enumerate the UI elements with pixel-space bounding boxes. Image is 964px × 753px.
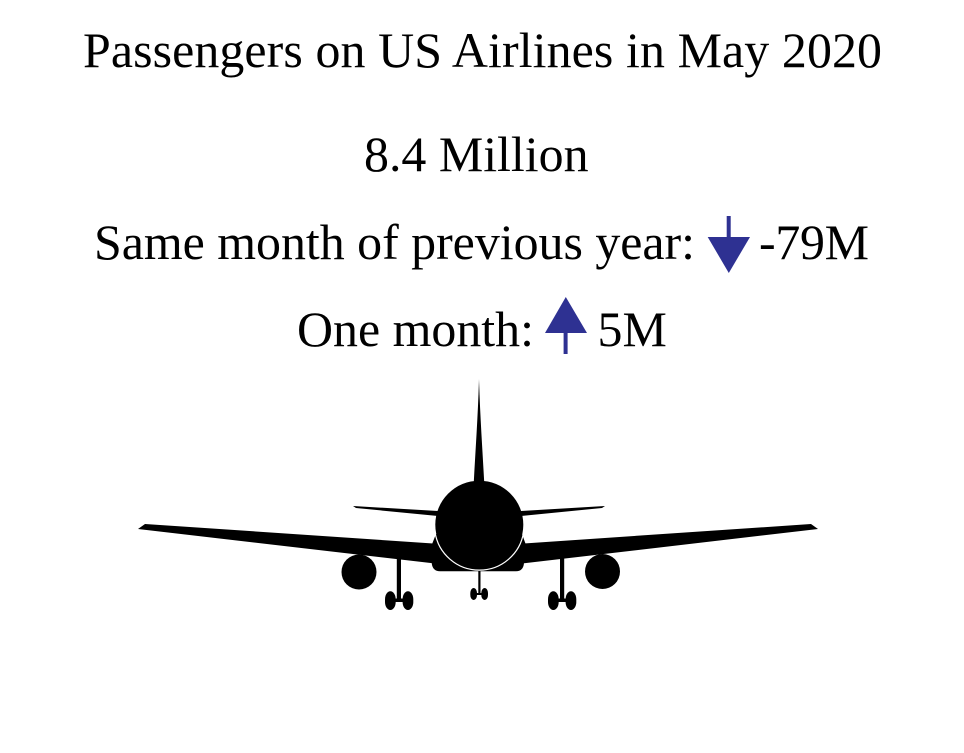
left engine [342, 554, 376, 590]
right tailplane [521, 506, 605, 516]
left tailplane [353, 506, 438, 516]
comparison text: one month: One month: [297, 302, 534, 357]
right landing gear [548, 558, 576, 610]
main figure: 8.4 million passengers: 8.4 Million [364, 127, 589, 182]
icon: down arrow [708, 216, 750, 273]
comparison text: same month of previous year: Same month of previous year: [94, 215, 695, 270]
title: Passengers on US Airlines in May 2020 [83, 23, 882, 78]
value: minus 79M: -79M [759, 215, 869, 270]
illustration: airplane front view [138, 379, 818, 610]
left wing [138, 524, 435, 564]
right engine [585, 554, 620, 589]
right wing [522, 524, 818, 564]
tail fin [474, 379, 484, 482]
fuselage nose [435, 481, 523, 569]
white nose outline [435, 532, 524, 570]
icon: up arrow [545, 297, 587, 354]
lower fuselage fairing [432, 534, 526, 571]
value: 5M: 5M [598, 302, 667, 357]
left landing gear [385, 558, 413, 610]
nose landing gear [470, 570, 488, 600]
